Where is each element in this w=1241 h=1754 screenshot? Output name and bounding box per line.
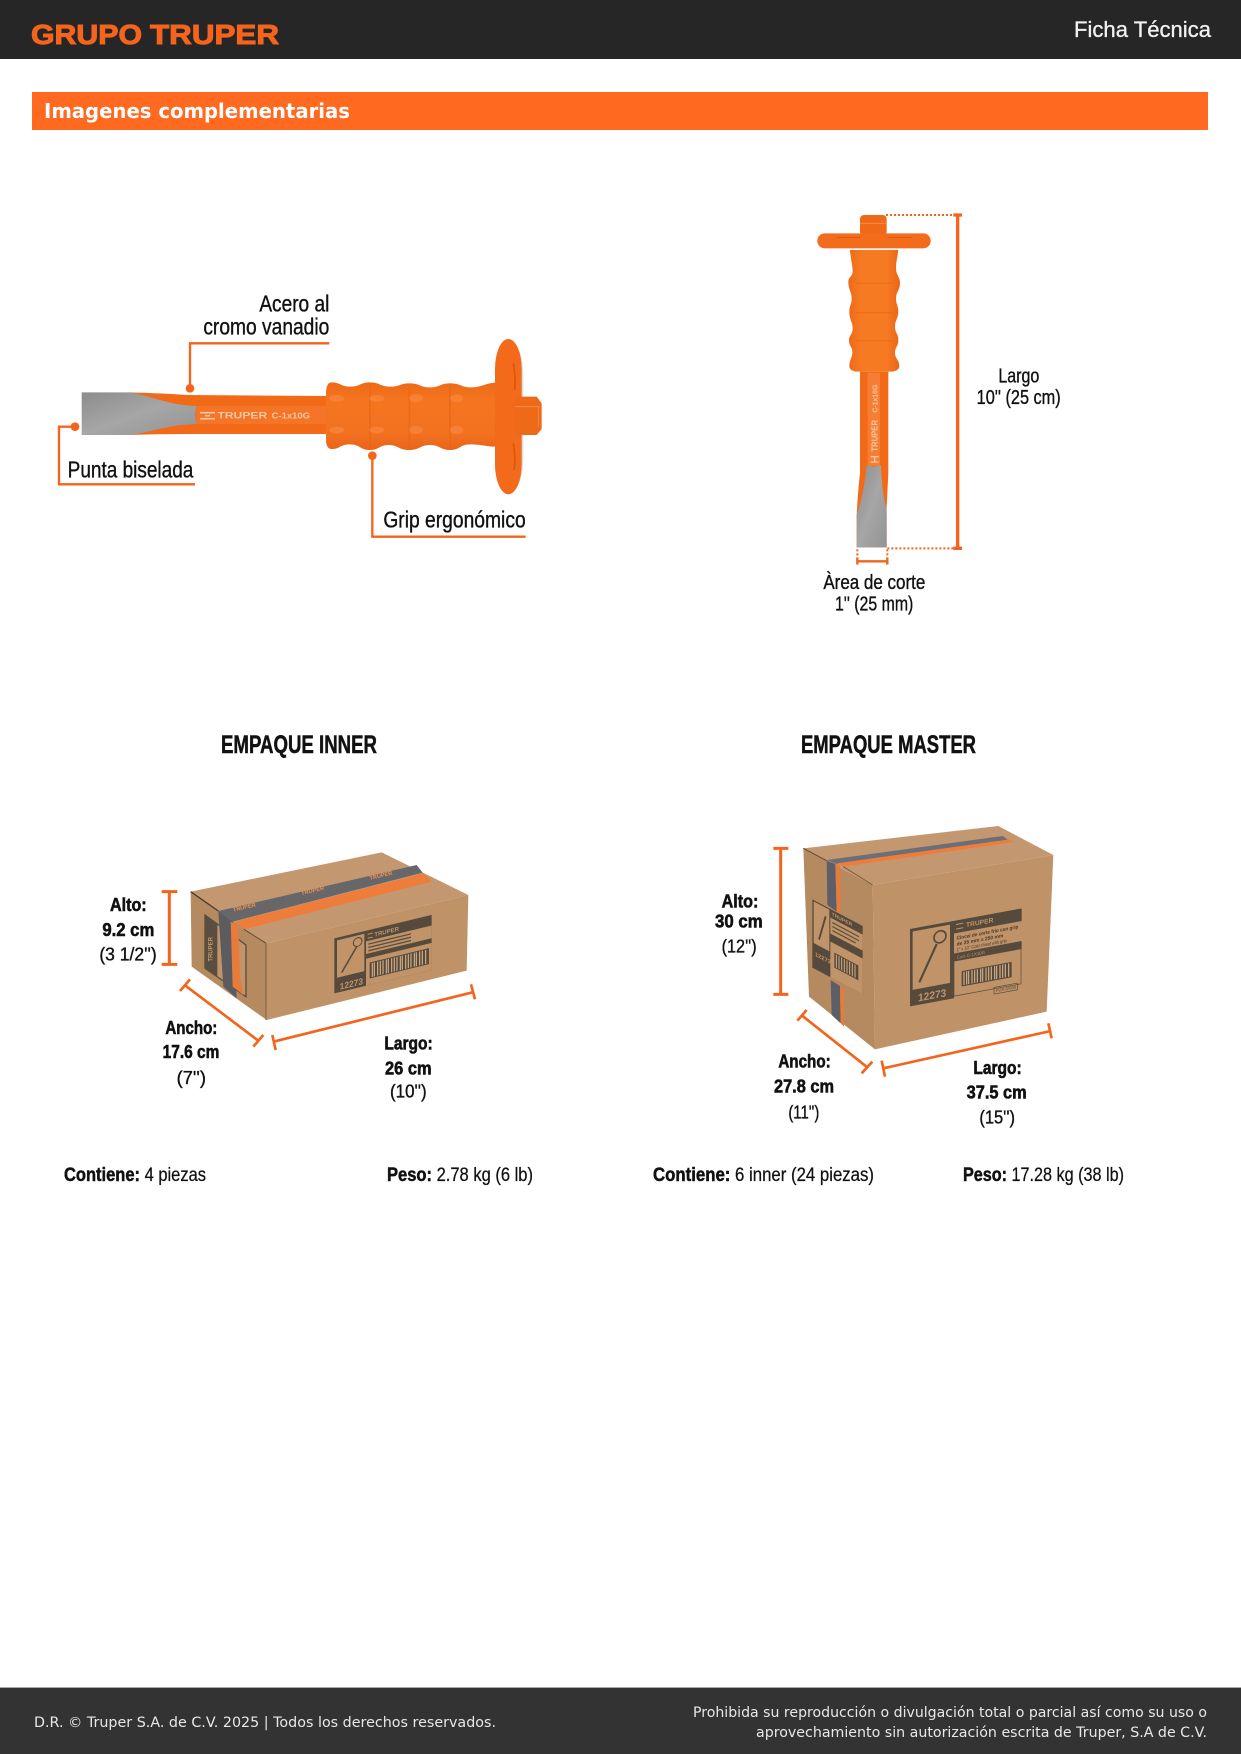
chisel vertical: C-1x10G [872, 385, 879, 413]
dimension: ancho master: Ancho: [778, 1050, 831, 1071]
dimension: alto master [715, 848, 788, 994]
cardboard box inner: TRUPER [301, 886, 325, 897]
panel: horizontal chisel with callouts [59, 291, 542, 537]
callout: Acero al cromo vanadio [186, 291, 329, 393]
footer legal notice: Prohibida su reproducción o divulgación total o parcial así como su uso o [693, 1705, 1207, 1721]
box label front: TRUPER [966, 917, 994, 929]
box label front [334, 915, 432, 993]
dimension: ancho inner: (7'') [177, 1067, 206, 1088]
cardboard box inner [191, 852, 468, 1020]
section heading bar [32, 92, 1208, 130]
cardboard box inner: TRUPER [209, 936, 215, 962]
dimension: largo: Largo [998, 366, 1039, 388]
footer legal notice [693, 1705, 1207, 1741]
dimension: largo inner: Largo: [384, 1032, 433, 1053]
dimension: largo master: (15'') [979, 1106, 1015, 1127]
header title: Ficha Técnica [1074, 17, 1212, 42]
dimension: largo inner [272, 984, 475, 1101]
callout: Punta biselada [59, 422, 195, 484]
callout: Punta biselada: Punta biselada [68, 456, 194, 482]
callout: Acero al cromo vanadio: cromo vanadio [203, 313, 329, 339]
dimension: alto inner [99, 892, 177, 965]
inner weight text: Peso: 2.78 kg (6 lb) [387, 1165, 533, 1186]
dimension: ancho inner [163, 979, 263, 1088]
box label front: de 25 mm x 250 mm [957, 933, 1004, 948]
callout: Grip ergonómico [368, 451, 526, 537]
dimension: ancho master [774, 1010, 872, 1122]
section heading bar: Imagenes complementarias [44, 99, 350, 123]
dimension: área de corte: Àrea de corte [823, 571, 925, 594]
logo: Grupo Truper: TRUPER [150, 19, 279, 50]
chisel vertical: TRUPER [870, 420, 879, 452]
panel: vertical chisel with dimensions [817, 215, 1061, 616]
dimension: largo inner: (10'') [390, 1080, 427, 1101]
dimension: ancho master: (11'') [788, 1101, 819, 1122]
box label side: 12273 [815, 952, 831, 966]
dimension: ancho inner: 17.6 cm [163, 1041, 219, 1062]
dimension: largo master [882, 1023, 1052, 1127]
dimension: alto inner: 9.2 cm [102, 919, 154, 940]
chisel horizontal [82, 339, 542, 494]
callout: Grip ergonómico: Grip ergonómico [383, 506, 526, 532]
dimension: largo master: 37.5 cm [967, 1081, 1027, 1102]
logo: Grupo Truper [31, 19, 279, 50]
cardboard box master [803, 826, 1053, 1049]
master contents text: Contiene: 6 inner (24 piezas) [653, 1165, 874, 1186]
dimension: ancho inner: Ancho: [165, 1017, 217, 1038]
box label front: TRUPER [374, 926, 400, 939]
dimension: largo: 10'' (25 cm) [977, 387, 1061, 409]
dimension: alto inner: (3 1/2'') [99, 944, 157, 965]
dimension: largo master: Largo: [973, 1057, 1022, 1078]
box label front [910, 908, 1022, 1010]
dimension: área de corte [823, 549, 925, 616]
box label front: 12273 [340, 976, 363, 992]
footer [0, 1687, 1241, 1754]
header bar [0, 0, 1241, 59]
heading: empaque inner: EMPAQUE INNER [221, 731, 377, 759]
box label front: Cod: C-1X10G [957, 950, 986, 960]
box label front: Cincel de corte frío con grip [957, 924, 1018, 942]
heading: empaque master: EMPAQUE MASTER [801, 731, 976, 759]
dimension: alto master: (12'') [722, 936, 757, 957]
callout: Acero al cromo vanadio: Acero al [259, 291, 329, 317]
dimension: área de corte: 1'' (25 mm) [835, 594, 913, 616]
footer legal notice: aprovechamiento sin autorización escrita de Truper, S.A de C.V. [756, 1725, 1207, 1741]
dimension: alto master: Alto: [722, 890, 758, 911]
logo: Grupo Truper: GRUPO [31, 19, 142, 50]
dimension: largo [886, 215, 1061, 548]
cardboard box inner: TRUPER [232, 903, 256, 914]
box label side [812, 899, 863, 994]
dimension: ancho master: 27.8 cm [774, 1076, 834, 1097]
chisel horizontal: C-1x10G [272, 412, 310, 421]
chisel vertical [817, 215, 931, 547]
chisel horizontal: TRUPER [217, 411, 268, 421]
box label front: PZA 6/500 [996, 984, 1017, 993]
box label front: 1" x 10" Cold chisel with grip [957, 938, 1007, 952]
footer copyright: D.R. © Truper S.A. de C.V. 2025 | Todos los derechos reservados. [34, 1715, 496, 1731]
box label side: TRUPER [832, 912, 852, 928]
inner contents text: Contiene: 4 piezas [64, 1165, 206, 1186]
box label front: 12273 [918, 987, 946, 1004]
master weight text: Peso: 17.28 kg (38 lb) [963, 1165, 1124, 1186]
dimension: largo inner: 26 cm [385, 1057, 432, 1078]
cardboard box inner: TRUPER [369, 871, 393, 882]
dimension: alto inner: Alto: [110, 894, 147, 915]
panel: inner box [99, 852, 475, 1101]
panel: master box [715, 826, 1053, 1127]
dimension: alto master: 30 cm [715, 910, 763, 931]
